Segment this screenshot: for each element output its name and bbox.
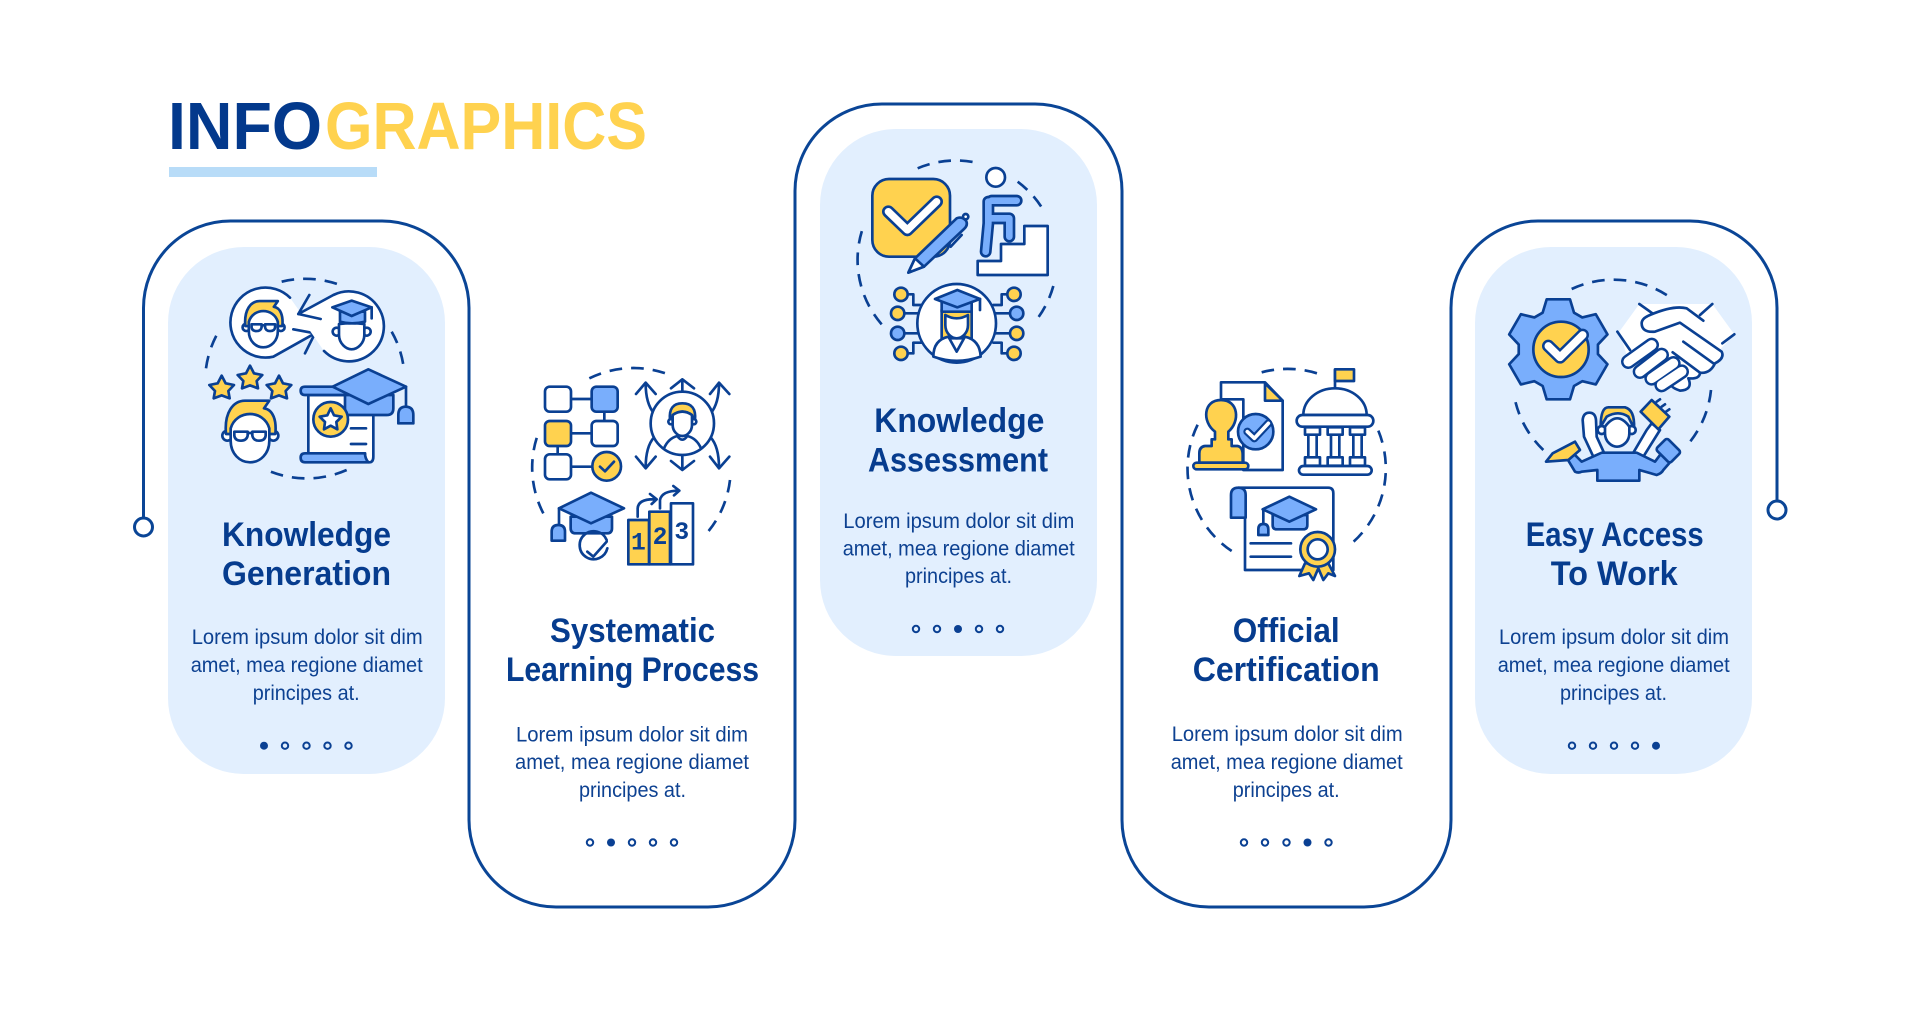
- body text: principes at.: [905, 565, 1012, 588]
- heading: To Work: [1551, 555, 1678, 593]
- body text: amet, mea regione diamet: [191, 654, 423, 677]
- body text: amet, mea regione diamet: [515, 751, 749, 774]
- body text: principes at.: [1233, 779, 1340, 802]
- icon: knowledge generation: [206, 279, 413, 478]
- body text: [1498, 626, 1730, 705]
- panel: easy access to work: [1475, 247, 1752, 774]
- title: INFO: [168, 89, 322, 164]
- body text: amet, mea regione diamet: [1498, 654, 1730, 677]
- icon: knowledge assessment: [858, 161, 1053, 363]
- body text: principes at.: [253, 682, 360, 705]
- pagination dots: [1569, 742, 1660, 750]
- heading: [1193, 612, 1380, 689]
- heading: Generation: [222, 555, 391, 593]
- panel: knowledge generation: [168, 247, 445, 774]
- body text: Lorem ipsum dolor sit dim: [843, 510, 1074, 533]
- heading: [222, 516, 391, 593]
- heading: [868, 402, 1048, 480]
- body text: [1171, 723, 1403, 802]
- heading: Knowledge: [874, 402, 1044, 440]
- body text: Lorem ipsum dolor sit dim: [192, 626, 423, 649]
- body text: [843, 510, 1075, 588]
- pagination dots: [913, 625, 1003, 633]
- heading: Easy Access: [1526, 516, 1704, 554]
- panel: official certification: [1171, 369, 1403, 846]
- icon: systematic learning process: [532, 368, 730, 564]
- panel: knowledge assessment: [820, 129, 1097, 656]
- pagination dots: [587, 838, 677, 846]
- heading: Systematic: [550, 612, 715, 650]
- heading: Learning Process: [506, 651, 759, 689]
- icon: systematic learning process: 2: [653, 524, 667, 552]
- heading: Official: [1233, 612, 1340, 650]
- body text: Lorem ipsum dolor sit dim: [1172, 723, 1403, 746]
- body text: [515, 724, 749, 802]
- panel: systematic learning process: [506, 368, 759, 846]
- body text: [191, 626, 423, 705]
- title: [168, 89, 647, 177]
- icon: systematic learning process: 1: [631, 529, 646, 557]
- title: GRAPHICS: [325, 89, 647, 164]
- heading: [1526, 516, 1704, 593]
- body text: amet, mea regione diamet: [1171, 751, 1403, 774]
- body text: Lorem ipsum dolor sit dim: [516, 724, 748, 746]
- body text: amet, mea regione diamet: [843, 538, 1075, 560]
- body text: principes at.: [1560, 682, 1667, 705]
- heading: [506, 612, 759, 689]
- heading: Assessment: [868, 442, 1048, 480]
- connector outline with end nodes: [134, 104, 1786, 907]
- pagination dots: [1241, 838, 1332, 846]
- icon: official certification: [1188, 369, 1386, 580]
- body text: principes at.: [579, 779, 686, 802]
- heading: Knowledge: [222, 516, 391, 554]
- icon: systematic learning process: 3: [674, 519, 689, 547]
- body text: Lorem ipsum dolor sit dim: [1499, 626, 1729, 649]
- icon: easy access to work: [1509, 280, 1734, 481]
- heading: Certification: [1193, 651, 1380, 689]
- pagination dots: [260, 742, 352, 750]
